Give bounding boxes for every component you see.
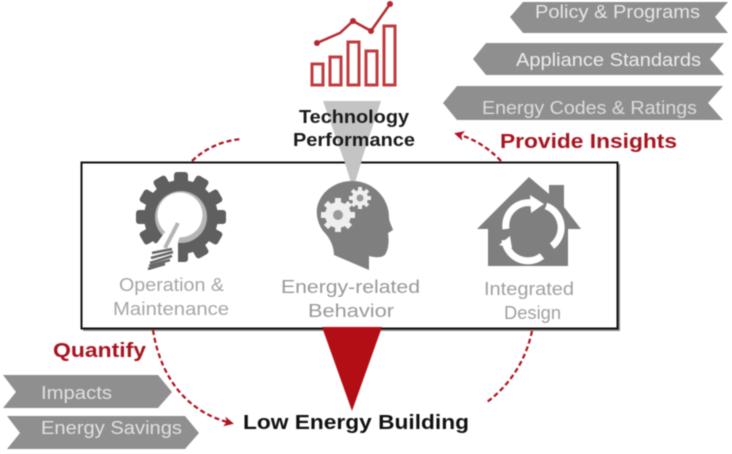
label: Integrated Design	[484, 279, 574, 323]
icon: house with cycle arrows	[477, 177, 581, 266]
label: Energy-related Behavior: Behavior	[308, 301, 394, 321]
chevron: Appliance Standards: Appliance Standards	[516, 50, 701, 70]
panel: strategies box	[82, 162, 620, 331]
label: Energy-related Behavior: Energy-related	[281, 277, 420, 297]
label: Integrated Design: Design	[504, 303, 561, 323]
arrow: provide insights dashed	[457, 134, 501, 161]
triangle: red arrow to low energy building	[322, 327, 382, 411]
label: Energy-related Behavior	[281, 277, 420, 321]
funnel: gray arrow into behavior	[323, 101, 381, 186]
arrow: top-left dashed arc	[192, 139, 241, 161]
chevron: Energy Savings: Energy Savings	[41, 418, 182, 438]
label: Provide Insights: Provide Insights	[500, 131, 677, 153]
chevron: Impacts	[3, 375, 172, 408]
heading: Technology Performance: Technology	[299, 107, 409, 127]
arrow: right dashed arc	[487, 331, 532, 402]
chevron: Impacts: Impacts	[41, 383, 112, 403]
chevron: Energy Codes & Ratings	[443, 86, 723, 120]
chevron: Appliance Standards	[473, 43, 724, 75]
chevron: Policy & Programs	[510, 2, 728, 33]
label: Operation & Maintenance: Maintenance	[113, 299, 229, 319]
icon: gear with light bulb	[136, 172, 226, 275]
arrow: quantify dashed	[153, 330, 231, 423]
heading: Technology Performance	[293, 107, 415, 150]
icon: head with gears	[317, 181, 393, 270]
heading: Technology Performance: Performance	[293, 130, 415, 150]
chevron: Policy & Programs: Policy & Programs	[535, 2, 700, 22]
label: Operation & Maintenance	[113, 275, 229, 319]
label: Quantify: Quantify	[53, 340, 147, 362]
funnel tip over box border	[344, 160, 362, 186]
label: Operation & Maintenance: Operation &	[119, 275, 224, 295]
label: Integrated Design: Integrated	[484, 279, 574, 299]
chevron: Energy Savings	[7, 416, 199, 449]
icon: technology performance bar chart	[312, 1, 395, 85]
label: Low Energy Building: Low Energy Building	[243, 412, 469, 434]
chevron: Energy Codes & Ratings: Energy Codes & Ratings	[482, 98, 697, 118]
